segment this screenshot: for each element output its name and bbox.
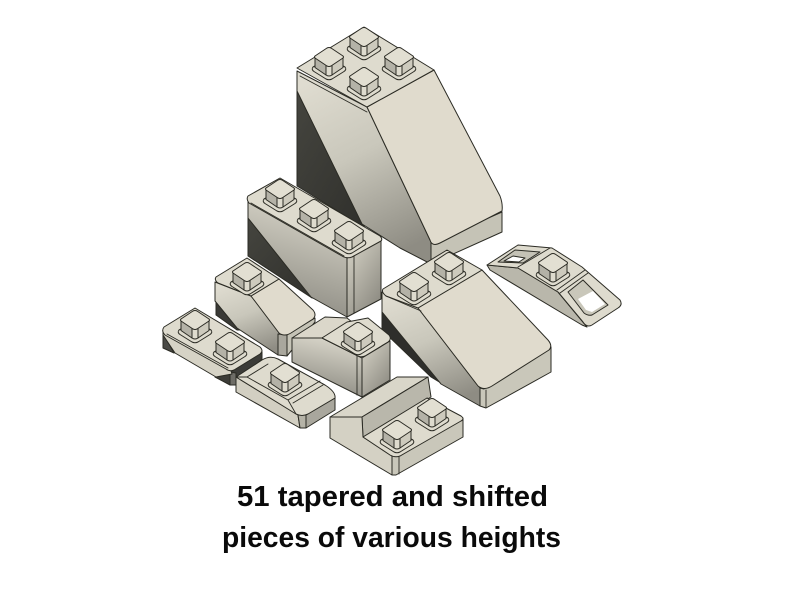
hole: front <box>568 280 608 315</box>
piece: mid block with one stud and reverse slope <box>292 317 390 397</box>
right face <box>480 347 551 408</box>
piece: large tall tapered block with four studs <box>297 27 502 264</box>
studs <box>263 180 366 254</box>
caption <box>222 481 561 554</box>
stud <box>230 262 264 295</box>
top plate <box>487 245 621 326</box>
left face <box>248 200 347 317</box>
front face <box>278 334 287 356</box>
sloped strip <box>292 317 352 338</box>
studs <box>380 398 449 453</box>
caption line 1: 51 tapered and shifted <box>237 481 548 513</box>
stud <box>341 322 375 355</box>
shadowed underside <box>297 90 372 226</box>
stud <box>268 364 302 396</box>
studs <box>312 28 416 100</box>
piece: long block with three studs <box>247 178 382 317</box>
front face <box>163 332 232 377</box>
top face <box>322 318 390 357</box>
wall front <box>362 377 431 437</box>
left face <box>297 71 431 264</box>
right face <box>287 318 315 356</box>
right face <box>306 398 335 428</box>
left face <box>330 417 392 475</box>
left dark wedge <box>163 333 174 353</box>
top face <box>163 308 262 371</box>
piece: thin tapered plate with two holes <box>487 245 621 327</box>
top face <box>236 357 335 416</box>
piece: low rounded block with one stud <box>236 357 335 428</box>
piece: flat block with two studs <box>163 308 262 385</box>
top face <box>247 178 382 258</box>
caption line 2: pieces of various heights <box>222 522 561 554</box>
platform top <box>363 398 463 457</box>
shadowed underside <box>216 300 243 330</box>
top face <box>215 258 279 296</box>
shadowed underside <box>382 311 441 383</box>
front face <box>292 338 362 397</box>
studs <box>178 310 247 365</box>
stud <box>536 254 570 286</box>
piece: base block with wall and two studs <box>330 377 463 475</box>
right foot face <box>431 212 502 264</box>
piece: large block with two studs <box>382 250 551 408</box>
top face <box>297 27 434 107</box>
studs <box>397 252 466 305</box>
side face <box>487 265 587 327</box>
sloped face <box>418 270 551 388</box>
top face <box>382 250 482 308</box>
sloped face <box>251 279 315 335</box>
hole: rear <box>498 250 540 263</box>
wall slope top <box>330 377 428 417</box>
piece: small tapered block with one stud <box>215 258 315 356</box>
left face <box>382 292 480 406</box>
front face <box>236 377 300 428</box>
dark lower faces <box>215 352 262 385</box>
right face <box>362 341 390 397</box>
left face <box>215 282 285 355</box>
right face <box>347 240 381 317</box>
platform right face <box>392 418 463 475</box>
shadowed underside <box>248 218 320 298</box>
sloped face <box>367 70 502 244</box>
